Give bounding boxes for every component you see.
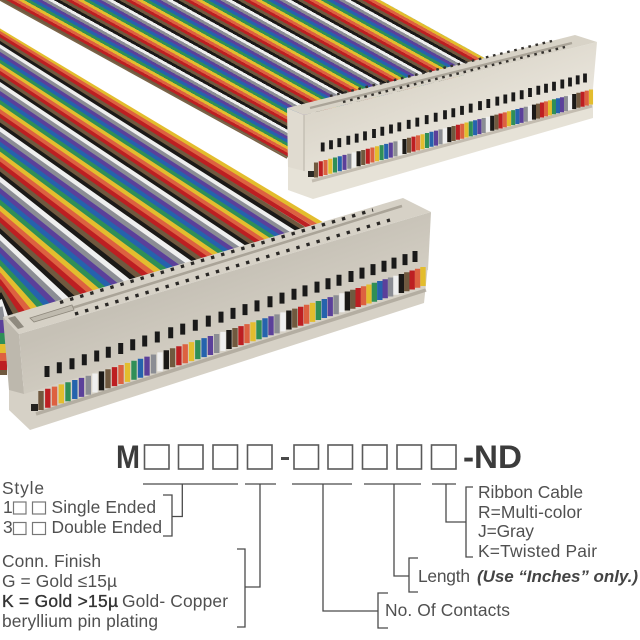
style option 3: 3 — [3, 517, 13, 537]
front connector pin shadow — [36, 290, 426, 414]
length note: (Use “Inches” only.) — [477, 567, 638, 586]
rear connector pin shadow — [312, 106, 592, 181]
plating note: beryllium pin plating — [2, 611, 158, 631]
connector finish heading: Conn. Finish — [2, 551, 101, 571]
rear connector side face — [287, 108, 304, 171]
front connector corner — [31, 404, 38, 411]
front connector contact holes — [60, 210, 390, 314]
front connector front face — [19, 212, 431, 394]
number of contacts block — [323, 484, 510, 628]
front connector — [3, 198, 431, 430]
finish bracket connector — [237, 484, 260, 627]
gold option K — [2, 591, 228, 611]
front connector groove — [72, 206, 402, 308]
front ribbon wire group 2 — [0, 85, 246, 262]
front connector side face — [3, 317, 24, 394]
front connector notch — [8, 316, 24, 329]
part number boxes group 1 — [144, 445, 272, 469]
part number suffix -ND: -ND — [463, 439, 522, 475]
connector finish block — [2, 484, 260, 631]
rear connector lower block — [288, 88, 593, 199]
rear connector top face — [287, 35, 597, 115]
front ribbon wire group 1 — [0, 47, 298, 248]
ribbon option R: R=Multi-color — [478, 502, 582, 522]
front ribbon wire group 3 — [0, 130, 191, 282]
ribbon cable block — [446, 482, 597, 561]
rear connector edge shading — [303, 115, 305, 171]
style option 3 — [3, 517, 162, 537]
front connector slot opening — [30, 305, 74, 322]
style option 1: Single Ended — [52, 497, 156, 517]
gold option K: K = Gold >15µ — [2, 591, 118, 611]
ribbon bracket connector — [446, 484, 473, 557]
ribbon option K: K=Twisted Pair — [478, 541, 597, 561]
style option 1: 1 — [3, 497, 13, 517]
length bracket connector — [394, 484, 418, 592]
part number dash — [281, 457, 289, 460]
style option 3: Double Ended — [52, 517, 162, 537]
contacts label: No. Of Contacts — [385, 600, 510, 620]
rear connector front face — [304, 42, 597, 172]
underlines under part number — [143, 483, 456, 485]
style block — [2, 478, 182, 537]
length block — [394, 484, 638, 592]
style option 1 — [3, 497, 156, 517]
gold option K: Gold- Copper — [122, 591, 228, 611]
contacts bracket connector — [323, 484, 388, 628]
front ribbon wire group 5 — [0, 238, 70, 327]
ribbon option J: J=Gray — [478, 521, 534, 541]
front ribbon sliver left of connector — [0, 320, 7, 375]
rear connector corner — [308, 171, 314, 177]
style heading: Style — [2, 478, 44, 498]
front connector slots — [47, 251, 415, 377]
front ribbon wire group 4 — [0, 180, 131, 301]
ribbon heading: Ribbon Cable — [478, 482, 583, 502]
rear connector contact holes — [330, 41, 565, 102]
rear ribbon cable — [0, 0, 490, 164]
front connector top face — [3, 198, 431, 334]
front ribbon cable — [0, 31, 325, 327]
front ribbon top edge wires — [0, 31, 325, 234]
front connector colored wires — [41, 267, 423, 410]
rear connector colored wires — [316, 90, 591, 178]
gold option G: G = Gold ≤15µ — [2, 571, 117, 591]
rear connector slots — [323, 74, 585, 152]
part number boxes group 2 — [294, 445, 456, 469]
length label: Length — [418, 566, 470, 586]
front connector lower block — [9, 265, 428, 430]
rear connector — [287, 35, 597, 199]
part number heading — [116, 439, 522, 475]
style bracket connector — [163, 484, 182, 536]
rear connector groove — [310, 43, 572, 108]
part number prefix M: M — [116, 439, 140, 475]
